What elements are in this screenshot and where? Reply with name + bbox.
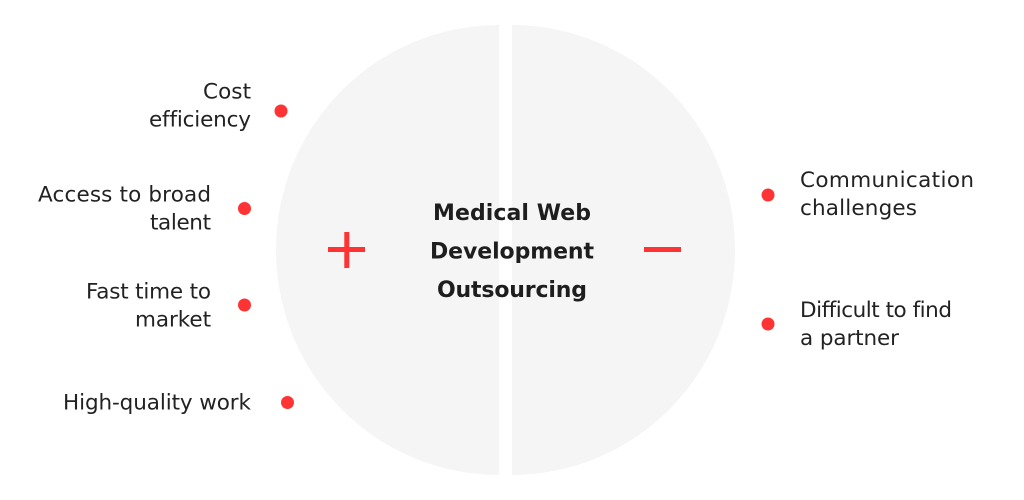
title: Development — [430, 240, 594, 264]
label: communication challenges: Communication — [800, 168, 974, 193]
title: Medical Web — [433, 201, 591, 226]
label: cost efficiency: efficiency — [149, 108, 251, 132]
label: cost efficiency: Cost — [203, 80, 251, 104]
label: difficult to find a partner: Difficult to find — [800, 298, 952, 323]
bullet: access to broad talent — [238, 202, 251, 215]
panel: left half circle — [276, 25, 499, 475]
title — [430, 201, 594, 303]
icon: plus sign — [328, 232, 365, 268]
label: communication challenges — [800, 168, 974, 221]
title: Outsourcing — [437, 278, 587, 303]
label: access to broad talent: Access to broad — [38, 182, 211, 208]
panel: right half circle — [512, 25, 735, 475]
label: difficult to find a partner: a partner — [800, 326, 899, 351]
bullet: cost efficiency — [274, 104, 288, 118]
bullet: difficult to find a partner — [762, 318, 774, 330]
label: access to broad talent: talent — [150, 210, 211, 236]
bullet: high-quality work — [281, 396, 294, 409]
label: fast time to market: market — [135, 308, 211, 332]
bullet: fast time to market — [238, 298, 251, 312]
icon: minus sign — [644, 247, 681, 252]
label: cost efficiency — [149, 80, 251, 132]
label: fast time to market — [86, 280, 211, 332]
label: access to broad talent — [38, 182, 211, 236]
bullet: communication challenges — [762, 188, 774, 202]
label: difficult to find a partner — [800, 298, 952, 351]
label: communication challenges: challenges — [800, 196, 917, 221]
label: high-quality work: High-quality work — [63, 390, 252, 416]
label: fast time to market: Fast time to — [86, 280, 211, 304]
